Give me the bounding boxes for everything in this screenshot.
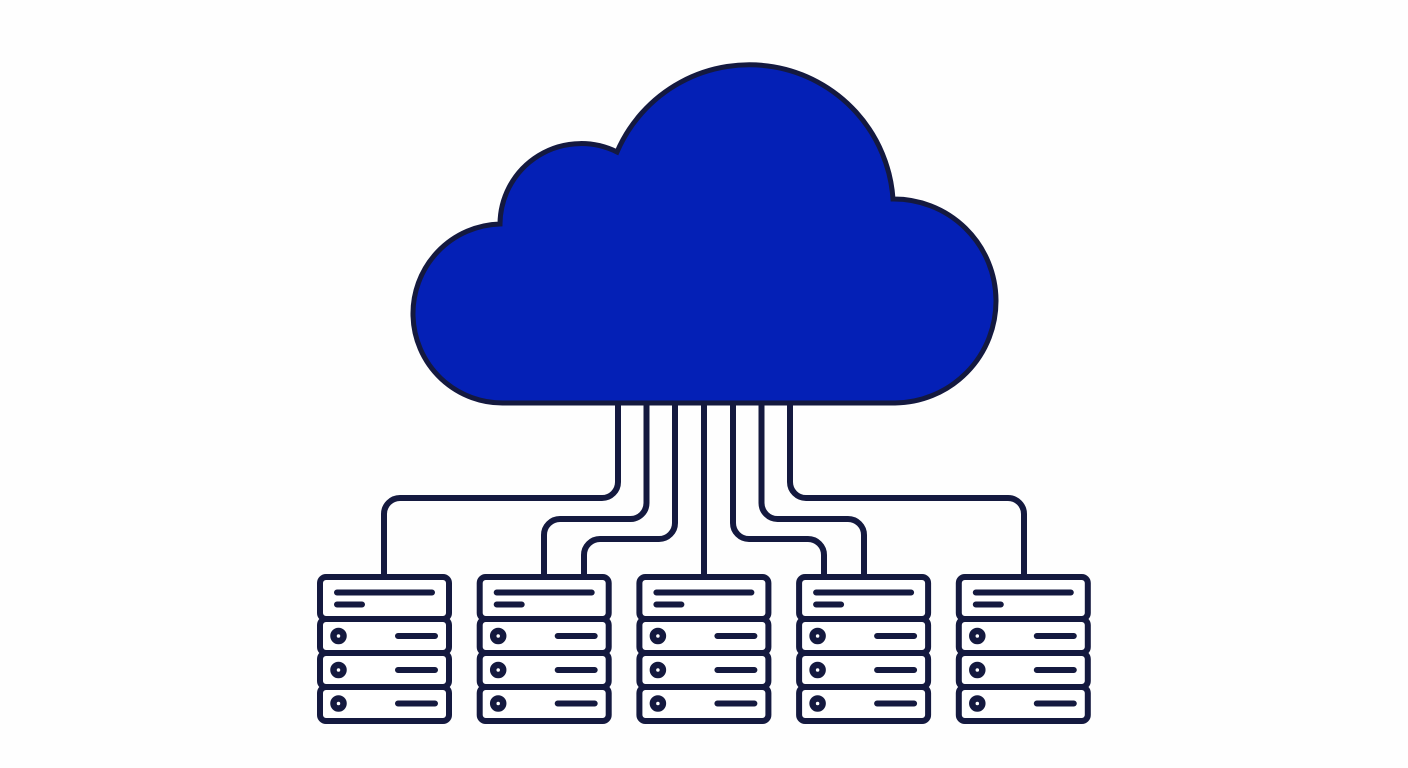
icon: server 5 — [959, 577, 1088, 721]
icon: server 1 — [320, 577, 449, 721]
icon: server 2 — [480, 577, 609, 721]
icon: server 3 — [639, 577, 768, 721]
icon: server 4 — [799, 577, 928, 721]
icon: cloud — [413, 65, 996, 403]
connector lines — [384, 403, 1024, 577]
